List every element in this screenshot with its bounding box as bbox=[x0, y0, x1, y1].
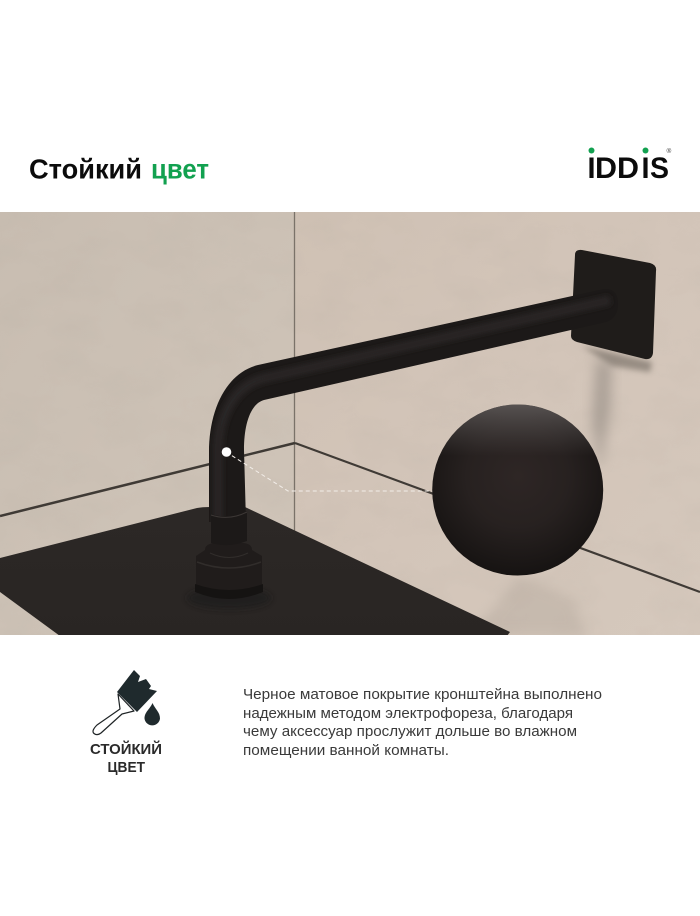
logo: IDDIS: D bbox=[595, 152, 617, 185]
photo: shower arm on tiled wall bbox=[0, 212, 700, 636]
description text: Черное матовое покрытие кронштейна выполнено bbox=[243, 686, 602, 703]
wall flange bbox=[571, 250, 656, 359]
icon caption: ЦВЕТ bbox=[108, 759, 145, 776]
coupling nut bbox=[187, 511, 271, 609]
icon caption: СТОЙКИЙ bbox=[90, 740, 162, 758]
description text: помещении ванной комнаты. bbox=[243, 742, 449, 759]
brush handle bbox=[93, 694, 134, 735]
paint drop bbox=[144, 703, 160, 725]
logo: IDDIS: D bbox=[617, 152, 639, 185]
shower arm bbox=[209, 296, 608, 522]
description text: надежным методом электрофореза, благодаря bbox=[243, 705, 573, 722]
wall shadows bbox=[470, 346, 652, 636]
magnified finish circle bbox=[432, 404, 603, 576]
title bbox=[29, 154, 209, 184]
description text: чему аксессуар прослужит дольше во влажном bbox=[243, 723, 577, 740]
logo: IDDIS: ® bbox=[666, 147, 672, 155]
wall tiles bbox=[0, 212, 700, 636]
icon caption bbox=[90, 740, 162, 776]
title: цвет bbox=[151, 154, 209, 184]
logo: IDDIS: I bbox=[642, 152, 650, 185]
callout leader line bbox=[226, 452, 433, 491]
logo: IDDIS: I bbox=[588, 152, 596, 185]
shower head panel bbox=[0, 507, 510, 636]
logo: IDDIS bbox=[588, 147, 672, 185]
icon: paint brush with drop bbox=[93, 670, 160, 735]
logo: IDDIS: S bbox=[650, 152, 669, 185]
description text bbox=[243, 686, 602, 759]
brush bristles bbox=[117, 670, 157, 712]
infographic page bbox=[0, 148, 700, 775]
callout marker dot bbox=[222, 447, 231, 457]
title: Стойкий bbox=[29, 154, 142, 184]
